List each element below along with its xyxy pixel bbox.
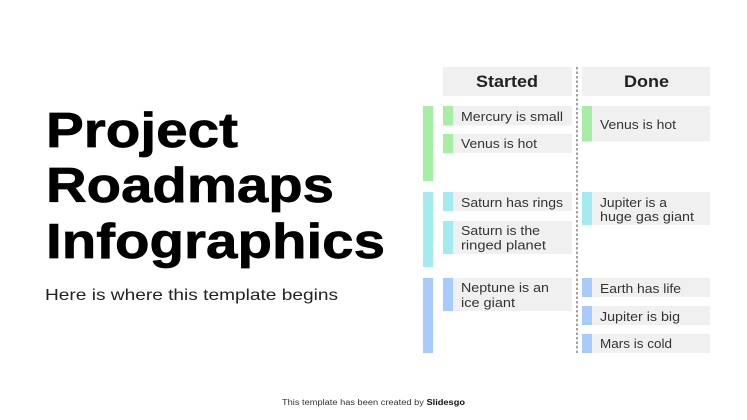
task: Neptune is an ice giant [443, 278, 572, 311]
task: Mars is cold: Mars is cold [600, 336, 672, 351]
title: Infographics [46, 215, 385, 269]
title: Roadmaps [46, 159, 334, 213]
task: Earth has life [582, 278, 710, 297]
task: Jupiter is big: Jupiter is big [600, 309, 680, 324]
task: Saturn has rings [443, 192, 572, 211]
task: Neptune is an ice giant: Neptune is an [461, 280, 549, 295]
task: Venus is hot (done): Venus is hot [600, 117, 676, 132]
task: Jupiter is a huge gas giant [582, 192, 710, 225]
task: Earth has life: Earth has life [600, 281, 681, 296]
task: Jupiter is big [582, 306, 710, 325]
task: Venus is hot (started) [443, 134, 572, 153]
task: Saturn is the ringed planet: Saturn is the [461, 223, 540, 238]
row bar: cyan [423, 192, 433, 267]
task: Venus is hot (started): Venus is hot [461, 136, 537, 151]
task: Mercury is small: Mercury is small [461, 109, 563, 124]
column header: Done [582, 67, 710, 96]
task: Mercury is small [443, 106, 572, 126]
subtitle: Here is where this template begins [45, 287, 338, 304]
task: Saturn is the ringed planet [443, 221, 572, 254]
footer credit: This template has been created by Slidesgo [282, 398, 465, 407]
task: Saturn is the ringed planet: ringed planet [461, 238, 546, 252]
task: Jupiter is a huge gas giant: huge gas giant [600, 209, 694, 224]
title: Project [46, 104, 238, 158]
task: Saturn has rings: Saturn has rings [461, 195, 564, 210]
row bar: blue [423, 278, 433, 353]
column header: Started [443, 67, 572, 96]
title [46, 104, 385, 269]
task: Neptune is an ice giant: ice giant [461, 295, 515, 310]
row bar: green [423, 106, 433, 181]
column header: Done: Done [624, 73, 669, 91]
task: Venus is hot (done) [582, 106, 710, 142]
column header: Started: Started [476, 73, 538, 91]
task: Jupiter is a huge gas giant: Jupiter is a [600, 195, 668, 210]
task: Mars is cold [582, 334, 710, 353]
